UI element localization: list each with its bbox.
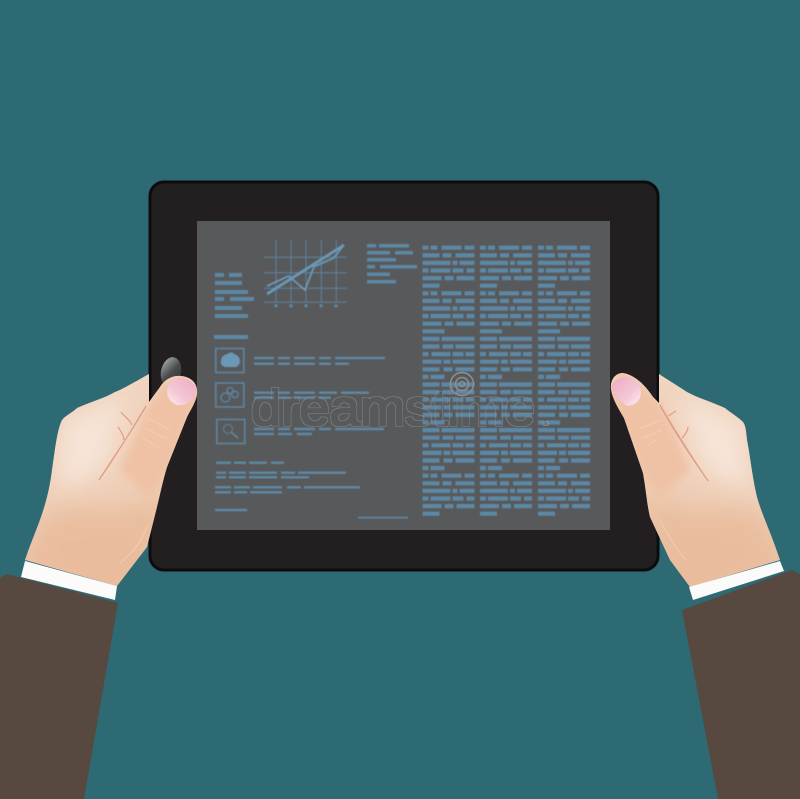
left hand <box>20 374 200 595</box>
screen: bottom left text <box>215 463 408 518</box>
left sleeve <box>0 574 118 799</box>
icon: piggy bank <box>216 348 244 372</box>
watermark id: ID <box>542 421 549 428</box>
watermark <box>251 372 535 436</box>
right hand <box>608 370 785 595</box>
right knuckle lines <box>640 420 686 560</box>
icon: magnifier <box>217 420 245 444</box>
data line <box>267 245 344 290</box>
tablet <box>150 182 658 570</box>
right thumb crease <box>660 405 708 481</box>
screen: captions beside icons <box>254 358 385 434</box>
left shirt cuff <box>21 561 117 600</box>
left knuckle lines <box>120 418 170 563</box>
left hand shape <box>25 374 197 586</box>
illustration: hands holding tablet <box>0 180 800 799</box>
screen <box>197 221 610 530</box>
screen: text columns <box>422 248 590 514</box>
icon: gears <box>216 383 244 407</box>
right hand shape <box>611 373 780 587</box>
line chart <box>264 240 347 306</box>
home button <box>158 355 184 389</box>
left thumbnail <box>167 378 196 405</box>
right shirt cuff <box>689 561 784 600</box>
left hand shading <box>20 374 200 595</box>
watermark text: dreamstime <box>251 380 535 436</box>
right thumbnail <box>612 377 641 406</box>
left thumb crease <box>99 406 146 480</box>
screen: left text block <box>215 273 254 318</box>
chart grid <box>264 240 347 302</box>
screen: top right text block <box>367 244 417 284</box>
right hand shading <box>608 370 785 595</box>
tablet body <box>150 182 658 570</box>
right sleeve <box>682 570 800 799</box>
screen: section heading <box>214 335 248 339</box>
axis dots <box>274 304 338 307</box>
trend line <box>267 245 344 294</box>
watermark logo <box>450 372 474 396</box>
